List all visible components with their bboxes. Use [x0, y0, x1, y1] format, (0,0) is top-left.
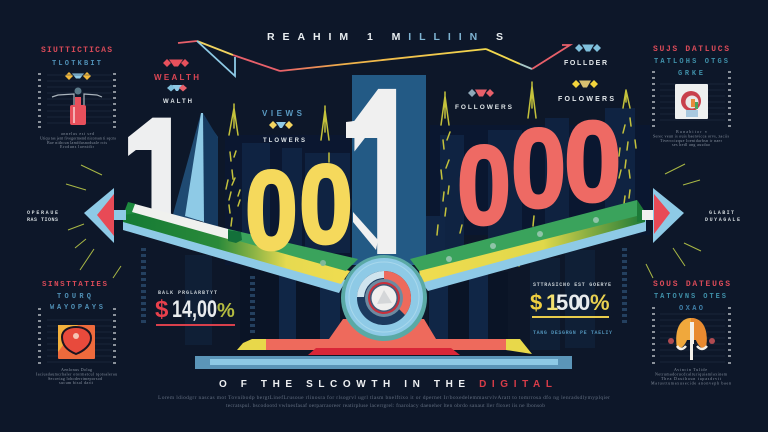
- panel: top right data: [652, 45, 731, 147]
- beam right green strip: [410, 200, 645, 271]
- big number 0 yellow 1: 0: [245, 149, 298, 274]
- stat: right percent: 0: [578, 290, 590, 315]
- panel: bottom left statistics: WAYOPAYS: [50, 304, 103, 312]
- beam left green strip: [228, 229, 358, 271]
- label: views: TLOWERS: [263, 138, 305, 144]
- panel: bottom left statistics: Iaciusdaumcrhaler otormetcul tqotsalerau: [36, 372, 117, 376]
- label: follder: FOLLDER: [564, 60, 607, 67]
- beam left white strip: [132, 204, 228, 239]
- central blue tower: [352, 75, 426, 265]
- beam right: [410, 200, 646, 291]
- panel: bottom left statistics: SINSTTATIES: [42, 281, 107, 289]
- panel: bottom right data: Matusttumaxusecide anonveph baen: [651, 380, 731, 386]
- icon: orange shell with key: [668, 318, 715, 360]
- big number 0 coral 3: 0: [564, 99, 621, 226]
- side label left: RAS TIONS: [27, 217, 58, 223]
- label: followers centre: [455, 89, 513, 111]
- side label left: [27, 210, 58, 223]
- panel: top left statistics: Bae nithcun lamfdusnoduale rcts: [47, 140, 107, 145]
- big number 0 coral 2: 0: [511, 106, 566, 231]
- stat: right percent: STTRASICNO EST GOERYE: [533, 282, 611, 288]
- diagonal white strip: [353, 212, 378, 250]
- panel: top right data: ses hedl ang ausdao: [672, 142, 710, 147]
- beam right blue strip: [420, 220, 646, 291]
- label: folowers right: [558, 80, 614, 103]
- panel: top left statistics: Eroduns laenidir: [60, 144, 95, 149]
- panel: top right data: Tiverccizque loenidarhsn ir naer: [660, 138, 723, 143]
- panel: top left statistics: TLOTKBIT: [52, 60, 101, 68]
- ray lines: [66, 164, 701, 278]
- stat: right percent: %: [590, 290, 610, 315]
- stat: right percent: 50: [556, 290, 580, 315]
- stat: left percent: 14,00: [172, 296, 217, 323]
- left arrow: [84, 188, 126, 243]
- big number 0 yellow 2: 0: [299, 143, 353, 268]
- big number 1 centre: 1: [345, 28, 422, 346]
- stat: left percent: %: [217, 300, 235, 322]
- stat: right percent: 1: [546, 290, 558, 315]
- side label right: GLABIT: [709, 210, 734, 216]
- panel: bottom right data: [651, 280, 731, 386]
- icon: photo card: [675, 84, 708, 119]
- panel: bottom left statistics: Secoviag lohoderrimeporsod: [48, 376, 102, 381]
- stat: left percent: $: [155, 296, 169, 323]
- label: wealth: WEALTH: [154, 73, 199, 82]
- icon: orange location badge: [58, 325, 95, 359]
- bottom heading: O F THE SLCOWTH IN THE DIGITAL: [219, 379, 552, 390]
- stat: right percent: [530, 282, 612, 336]
- panel: bottom left statistics: [36, 281, 117, 385]
- panel: top left statistics: Utiqu tas jent fivegormend nicorsan ti sqcns: [40, 136, 116, 140]
- stat: left percent: BALK PRGLARBTYT: [158, 290, 217, 296]
- label: wealth: WALTH: [163, 99, 192, 105]
- big number 0 coral 1: 0: [457, 124, 511, 249]
- panel: bottom right data: SOUS DATEUGS: [653, 280, 730, 289]
- beam left: [123, 202, 358, 293]
- top trend line: [178, 41, 570, 76]
- title: REAHIM 1 M ILLIIN S: [267, 31, 503, 43]
- label: follder: [564, 44, 607, 67]
- stat: left percent: [155, 290, 235, 326]
- panel: bottom right data: Avincin Tulide: [674, 367, 707, 372]
- beam right gradient strip: [419, 212, 645, 283]
- panel: bottom left statistics: sucum bisal darit: [59, 380, 94, 385]
- side label right: [705, 210, 740, 223]
- stat: right percent: $: [530, 290, 542, 315]
- background city buildings: [185, 108, 650, 350]
- label: wealth: [154, 59, 199, 105]
- label: views: [262, 109, 305, 144]
- panel: bottom right data: Thea Dauthaun tapasdrvit: [661, 376, 722, 381]
- big number 1 left: 1: [118, 80, 197, 275]
- icon: red cup with handles: [52, 88, 102, 125]
- label: views: VIEWS: [262, 109, 303, 118]
- side label right: DUYAGALE: [705, 217, 740, 223]
- panel: top right data: SUJS DATLUCS: [653, 45, 729, 54]
- panel: bottom left statistics: TOURQ: [57, 293, 91, 301]
- right arrow: [642, 188, 684, 243]
- panel: top left statistics: [38, 46, 116, 149]
- bottom paragraph: [158, 394, 610, 409]
- big spire: [172, 113, 218, 228]
- beam left gradient strip: [123, 210, 350, 284]
- panel: top right data: Bunabitor v: [676, 129, 707, 134]
- dashed columns: [141, 248, 627, 333]
- yellow spires and leaves: [226, 82, 636, 266]
- label: folowers right: FOLOWERS: [558, 96, 614, 103]
- base stand: [195, 319, 572, 369]
- side label left: OPERAUE: [27, 210, 58, 216]
- stat: right percent: TANG DESGRGN PE TAELIY: [533, 330, 612, 336]
- panel: bottom right data: Netrumadorucdcalturiquiamlaxinem: [655, 372, 728, 376]
- panel: top left statistics: annelus est sed: [61, 131, 94, 136]
- panel: top right data: TATLOHS OTGS: [654, 58, 728, 66]
- panel: top right data: Serec veun is ouis baenvicca orvs, zaciis: [653, 134, 729, 140]
- bottom paragraph: tecratspul. bscodootd vwlnesfasaf oerparraoreer reatirpluse lacerrgrel: fnarolacy daeneher lten obrdo sanaut ller floxet iis ne lbonsob: [226, 402, 545, 409]
- bottom paragraph: Lorem ldiodgrr nascas mot Tovnibodp bergtLinefLrusoue rlinosra for rlsogrvl ugrl tlasm bnelftixo it or dpernet Ir/boxedelemmasrvlvAratt to tomrrosa dfo ng lenradsdlymyplqier: [158, 394, 610, 401]
- big number 1 centre: [346, 88, 396, 254]
- big number 1 left: [128, 118, 171, 214]
- beam left green block: [228, 230, 242, 243]
- panel: top left statistics: SIUTTICTICAS: [41, 46, 112, 55]
- beam left blue strip: [123, 218, 346, 293]
- beam left end cap: [123, 202, 138, 215]
- panel: top right data: GRKE: [678, 70, 703, 78]
- label: followers centre: FOLLOWERS: [455, 104, 513, 111]
- panel: bottom right data: OXAO: [679, 305, 703, 313]
- central gauge: [341, 255, 427, 341]
- panel: bottom left statistics: Aenlonus Dolag: [61, 367, 92, 372]
- panel: bottom right data: TATOVNS OTES: [654, 293, 726, 301]
